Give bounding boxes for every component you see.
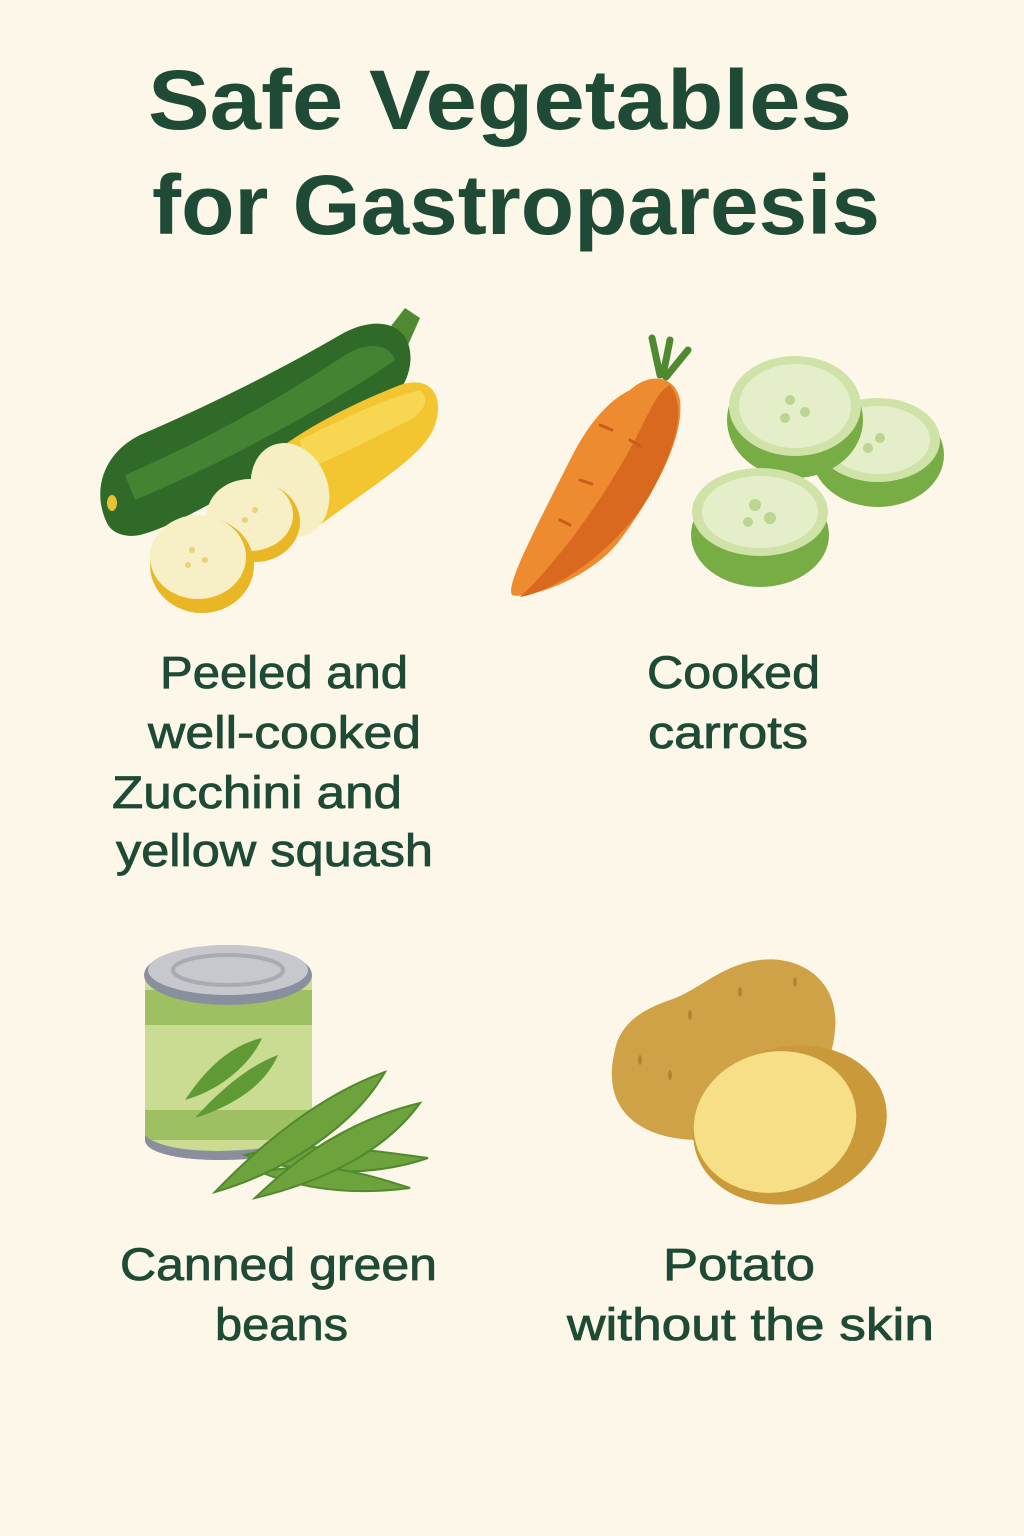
icon: carrot <box>511 338 688 597</box>
label: carrots: Cooked <box>647 647 820 698</box>
label: green beans <box>120 1239 437 1350</box>
label: zucchini: Peeled and <box>160 647 408 698</box>
label: potato <box>566 1239 934 1350</box>
label: zucchini: yellow squash <box>116 825 433 876</box>
label: potato: without the skin <box>566 1299 934 1350</box>
label: carrots <box>647 647 820 758</box>
label: potato: Potato <box>663 1239 815 1290</box>
icon: cucumber slices <box>691 356 944 587</box>
title: Safe Vegetables <box>148 53 852 147</box>
label: zucchini: well-cooked <box>147 707 421 758</box>
label: carrots: carrots <box>648 707 808 758</box>
label: green beans: beans <box>215 1299 348 1350</box>
title <box>148 53 880 252</box>
icon: zucchini and yellow squash <box>100 308 438 613</box>
label: zucchini <box>112 647 433 876</box>
label: green beans: Canned green <box>120 1239 437 1290</box>
label: zucchini: Zucchini and <box>112 767 402 818</box>
icon: potato <box>612 959 905 1226</box>
title: for Gastroparesis <box>152 158 880 252</box>
icon: canned green beans <box>144 945 428 1198</box>
